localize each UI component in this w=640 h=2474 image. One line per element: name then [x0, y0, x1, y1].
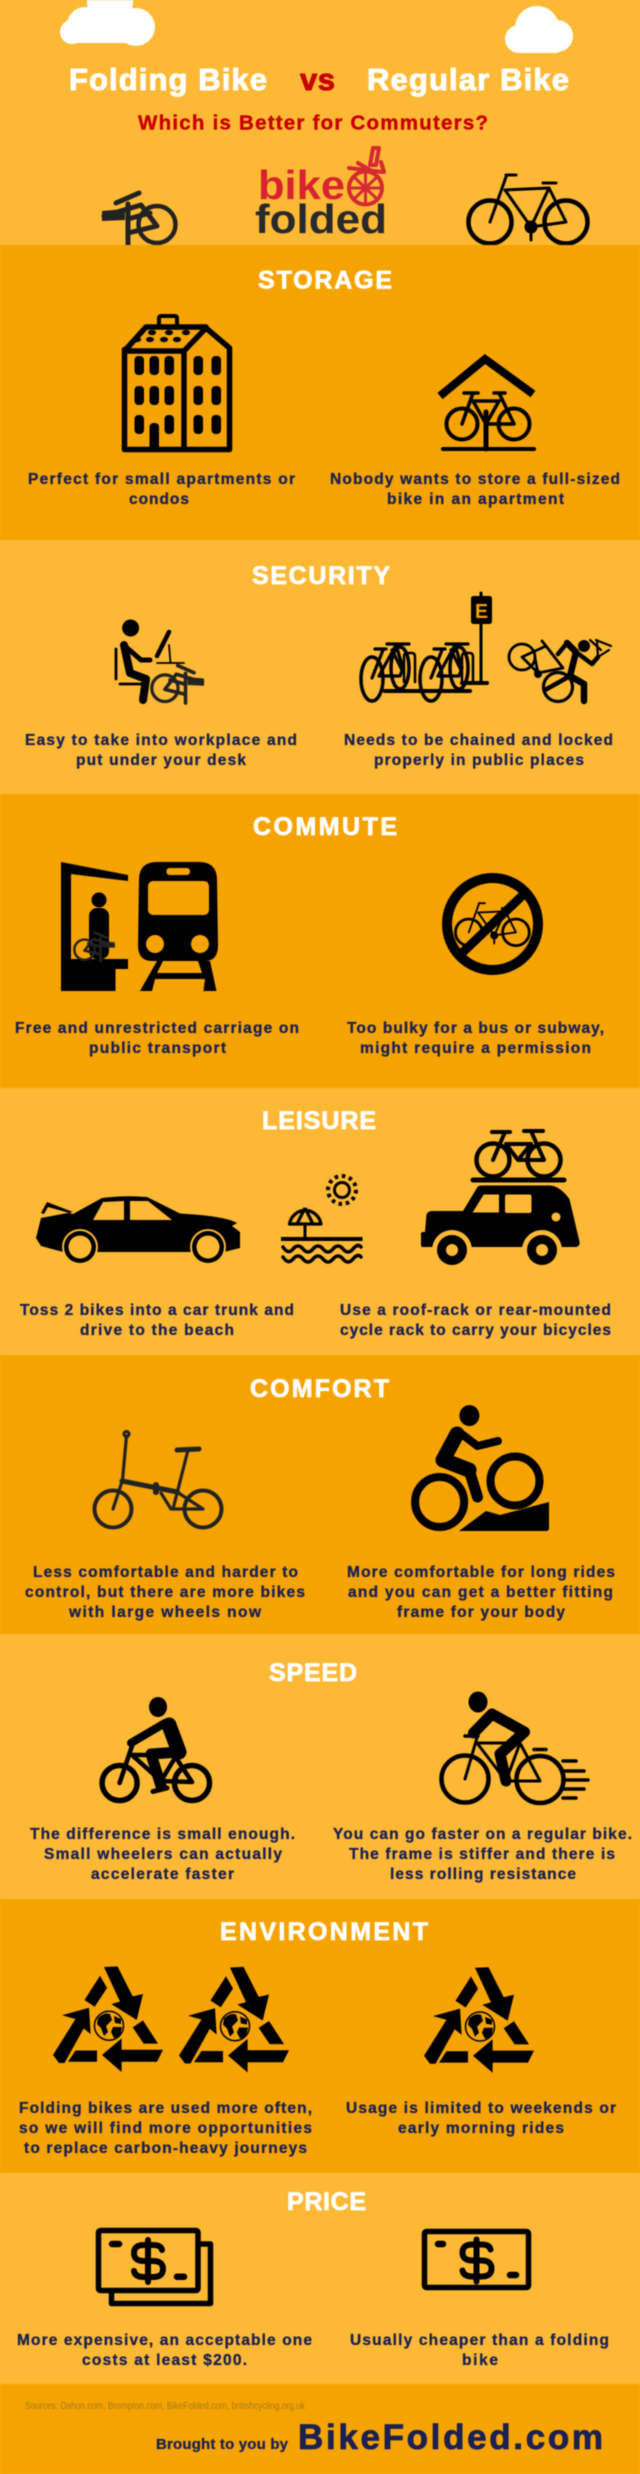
icon: two banknotes	[98, 2230, 210, 2304]
text: folding speed	[30, 1826, 295, 1883]
icon: regular bike	[468, 175, 588, 244]
text: regular security	[344, 732, 613, 769]
text: regular price: Usually cheaper than a folding	[350, 2332, 609, 2349]
panel: header	[0, 0, 640, 245]
text: folding security	[25, 732, 297, 769]
heading: STORAGE	[258, 266, 392, 294]
icon: thief stealing bike	[509, 640, 611, 702]
text: folding storage: condos	[129, 491, 189, 508]
logo: bike folded: folded	[255, 196, 387, 242]
text: folding leisure: Toss 2 bikes into a car trunk and	[20, 1302, 294, 1319]
text: folding security: put under your desk	[76, 752, 246, 769]
text: regular comfort	[347, 1564, 615, 1621]
icon: bike under roof	[440, 359, 534, 449]
text: regular storage: Nobody wants to store a full-sized	[330, 471, 620, 488]
text: regular speed: You can go faster on a regular bike.	[333, 1826, 632, 1843]
icon: folded bike	[102, 193, 176, 245]
panel: speed	[0, 1634, 640, 1899]
icon: recycle globe one	[53, 1966, 163, 2072]
text: folding price: More expensive, an acceptable one	[17, 2332, 312, 2349]
icon: no bikes sign	[447, 878, 538, 970]
text: regular leisure	[340, 1302, 611, 1339]
text: regular comfort: frame for your body	[397, 1604, 565, 1621]
icon: recycle globe two	[179, 1967, 289, 2072]
heading: COMMUTE	[253, 813, 397, 841]
icon: cloud right	[505, 6, 573, 53]
text: folding security: Easy to take into workplace and	[25, 732, 297, 749]
icon: one banknote	[424, 2232, 528, 2288]
icon: person at station with folded bike	[61, 862, 128, 991]
text: folding price: costs at least $200.	[82, 2352, 247, 2369]
text: folding leisure	[20, 1302, 294, 1339]
icon: beach with sun and umbrella	[281, 1176, 362, 1262]
logo: bike folded: bike	[258, 162, 345, 208]
panel: leisure	[0, 1088, 640, 1355]
text: regular comfort: More comfortable for long rides	[347, 1564, 615, 1581]
text: regular storage	[330, 471, 620, 508]
text: regular leisure: Use a roof-rack or rear-mounted	[340, 1302, 611, 1319]
text: folding speed: The difference is small enough.	[30, 1826, 295, 1843]
text: folding price	[17, 2332, 312, 2369]
text: folding commute: Free and unrestricted carriage on	[15, 1020, 299, 1037]
text: folding commute: public transport	[89, 1040, 226, 1057]
logo: bike folded	[255, 148, 387, 242]
icon: recycle globe three	[424, 1967, 534, 2073]
text: folding comfort: Less comfortable and harder to	[33, 1564, 298, 1581]
sources: Sources: Dahon.com, Brompton.com, BikeFolded.com, britishcycling.org.uk	[25, 2401, 306, 2412]
panel: footer	[0, 2384, 640, 2474]
text: folding speed: Small wheelers can actually	[44, 1846, 282, 1863]
text: regular security: Needs to be chained and locked	[344, 732, 613, 749]
heading: SPEED	[269, 1659, 357, 1687]
text: folding environment: to replace carbon-heavy journeys	[24, 2140, 307, 2157]
title: Folding Bike	[69, 62, 267, 97]
text: regular environment: Usage is limited to weekends or	[346, 2100, 616, 2117]
heading: SECURITY	[252, 562, 390, 590]
text: folding environment	[19, 2100, 312, 2157]
icon: cloud left	[60, 0, 155, 46]
text: folding environment: so we will find more opportunities	[19, 2120, 312, 2137]
text: regular price: bike	[462, 2352, 498, 2369]
text: folding comfort: control, but there are more bikes	[25, 1584, 305, 1601]
text: regular environment	[346, 2100, 616, 2137]
text: folding leisure: drive to the beach	[80, 1322, 234, 1339]
icon: car with roof rack bike	[421, 1131, 580, 1270]
text: regular commute	[347, 1020, 604, 1057]
subtitle: Which is Better for Commuters?	[138, 112, 488, 134]
icon: rider climbing hill	[415, 1405, 549, 1531]
text: regular commute: Too bulky for a bus or subway,	[347, 1020, 604, 1037]
icon: car with open trunk	[36, 1196, 240, 1265]
icon: small wheel folding bike	[94, 1432, 222, 1528]
text: folding environment: Folding bikes are used more often,	[19, 2100, 312, 2117]
text: folding comfort: with large wheels now	[68, 1604, 262, 1621]
panel: environment	[0, 1899, 640, 2173]
brought to you by: Brought to you by	[156, 2436, 289, 2453]
title: Regular Bike	[367, 62, 569, 97]
panel: price	[0, 2173, 640, 2384]
brand name: BikeFolded.com	[298, 2418, 603, 2457]
icon: train	[138, 862, 218, 991]
text: regular speed	[333, 1826, 632, 1883]
text: regular comfort: and you can get a better fitting	[348, 1584, 613, 1601]
heading: ENVIRONMENT	[220, 1918, 428, 1946]
panel: commute	[0, 794, 640, 1088]
icon: bikes at rack with sign: E	[475, 601, 488, 623]
panel: security	[0, 540, 640, 794]
title	[69, 62, 569, 97]
icon: bikes at rack with sign	[361, 593, 492, 701]
heading: PRICE	[287, 2188, 366, 2216]
text: regular price	[350, 2332, 609, 2369]
text: folding commute	[15, 1020, 299, 1057]
text: regular speed: The frame is stiffer and there is	[349, 1846, 615, 1863]
text: folding comfort	[25, 1564, 305, 1621]
icon: apartment building	[124, 316, 230, 451]
text: regular leisure: cycle rack to carry your bicycles	[340, 1322, 611, 1339]
text: regular security: properly in public places	[374, 752, 584, 769]
heading: LEISURE	[262, 1107, 376, 1135]
text: regular storage: bike in an apartment	[387, 491, 564, 508]
text: regular environment: early morning rides	[398, 2120, 564, 2137]
heading: COMFORT	[250, 1375, 389, 1403]
icon: rider on folding bike	[102, 1697, 210, 1800]
text: regular commute: might require a permission	[360, 1040, 591, 1057]
panel: comfort	[0, 1355, 640, 1634]
text: folding speed: accelerate faster	[91, 1866, 234, 1883]
text: regular speed: less rolling resistance	[390, 1866, 576, 1883]
icon: fast rider on regular bike	[442, 1692, 588, 1803]
title: vs	[300, 62, 335, 97]
icon: person at desk with folded bike	[116, 620, 204, 703]
text: folding storage: Perfect for small apartments or	[28, 471, 295, 488]
panel: storage	[0, 245, 640, 540]
text: folding storage	[28, 471, 295, 508]
